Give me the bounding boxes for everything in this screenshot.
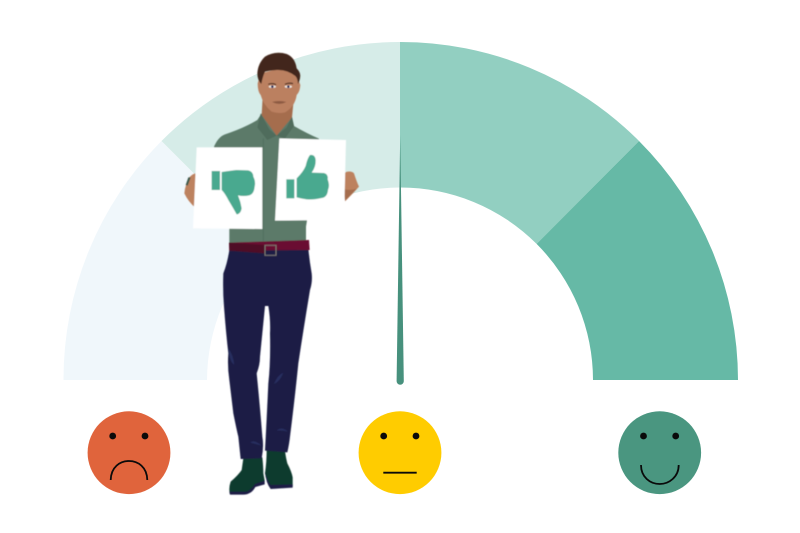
hair bbox=[257, 53, 300, 84]
right hand bbox=[341, 172, 359, 201]
gauge needle bbox=[397, 135, 404, 385]
right shoe bbox=[265, 449, 293, 487]
belt bbox=[229, 240, 310, 251]
gauge segment: low bbox=[162, 42, 400, 244]
sign: thumbs up bbox=[275, 138, 346, 221]
placket bbox=[262, 138, 265, 243]
gauge segment: very high bbox=[537, 141, 738, 380]
brows bbox=[268, 83, 293, 85]
face: neutral bbox=[359, 411, 441, 494]
mouth bbox=[272, 101, 286, 104]
collar bbox=[257, 113, 294, 140]
shirt bbox=[214, 113, 319, 243]
eyes bbox=[269, 85, 276, 88]
gauge segment: very low bbox=[63, 141, 264, 380]
left shoe bbox=[229, 457, 265, 494]
sign: thumbs down bbox=[193, 147, 262, 229]
trousers bbox=[223, 248, 312, 459]
upper body bbox=[184, 53, 359, 255]
face bbox=[258, 68, 300, 113]
neck bbox=[262, 97, 294, 136]
gauge segment: high bbox=[400, 42, 639, 244]
legs and shoes bbox=[223, 248, 312, 495]
gauge bbox=[63, 42, 738, 380]
face: unhappy bbox=[88, 411, 170, 494]
left hand bbox=[184, 173, 202, 207]
man holding thumbs signs bbox=[184, 53, 359, 495]
face: happy bbox=[618, 411, 701, 494]
